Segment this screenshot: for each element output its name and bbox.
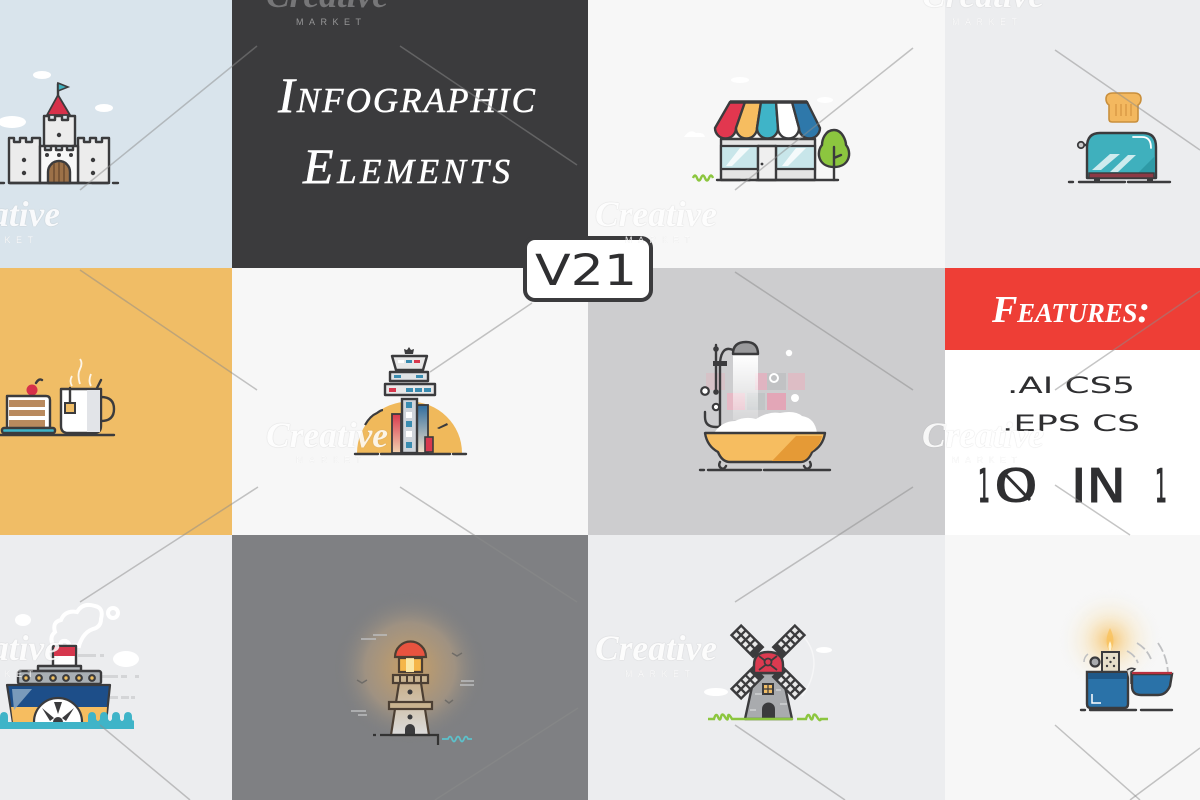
features header (945, 268, 1200, 350)
title: Infographic (277, 67, 536, 123)
icon: airport control tower (355, 347, 466, 454)
panel: shop background (588, 0, 945, 268)
features list (1002, 374, 1140, 437)
watermark: Creative Market on light panels: MARKET (296, 455, 362, 465)
panel: title background (232, 0, 588, 268)
watermark: Creative Market on light panels: MARKET (625, 669, 690, 679)
version badge: V21 (525, 238, 651, 300)
watermark: Creative Market on light panels: MARKET (952, 455, 1018, 465)
panel: toaster background (945, 0, 1200, 268)
icon: bathtub and shower (700, 342, 830, 470)
icon: shop (684, 77, 849, 180)
watermark: Creative Market on light panels: MARKET (952, 17, 1018, 27)
features count: 10 in 1 (978, 459, 1167, 513)
features list: .AI CS5 (1007, 374, 1135, 399)
panel: lighter background (945, 535, 1200, 800)
watermark: Creative Market on light panels (0, 0, 1044, 679)
features count: 10 in 1: 0 (992, 459, 1040, 513)
icon: lighthouse (335, 593, 485, 745)
panel: castle background (0, 0, 232, 268)
features count: 10 in 1: IN (1071, 459, 1126, 513)
panel: airport tower background (232, 268, 588, 535)
title: Elements (302, 138, 510, 194)
panel: bathtub background (588, 268, 945, 535)
icon: zippo lighter (1058, 588, 1172, 710)
version badge: V21: V21 (535, 246, 637, 296)
title (277, 67, 536, 194)
watermark: Creative Market on dark panel (266, 0, 388, 27)
features heading text: Features: (991, 289, 1150, 331)
panel: lighthouse background (232, 535, 588, 800)
icon: steamship (0, 603, 139, 729)
watermark: Creative Market on light panels: Creative (595, 628, 717, 668)
features count: 10 in 1: 1 (978, 459, 990, 513)
panel: windmill background (588, 535, 945, 800)
icon: castle (0, 71, 118, 183)
panel: cake and tea background (0, 268, 232, 535)
watermark: Creative Market on light panels: Creative (595, 194, 717, 234)
watermark: Creative Market on light panels: Creative (266, 415, 388, 455)
watermark: Creative Market on light panels: Creative (922, 415, 1044, 455)
icon: windmill (704, 624, 832, 720)
features list: .EPS CS (1002, 412, 1140, 437)
watermark: Creative Market on light panels: MARKET (625, 235, 690, 245)
panel: steamship background (0, 535, 232, 800)
icon: toaster (1069, 93, 1170, 182)
icon: cake and tea (0, 359, 114, 435)
text: 1 (1155, 459, 1167, 513)
watermark: Creative Market on dark panel: MARKET (296, 17, 362, 27)
panel: features background (945, 268, 1200, 535)
